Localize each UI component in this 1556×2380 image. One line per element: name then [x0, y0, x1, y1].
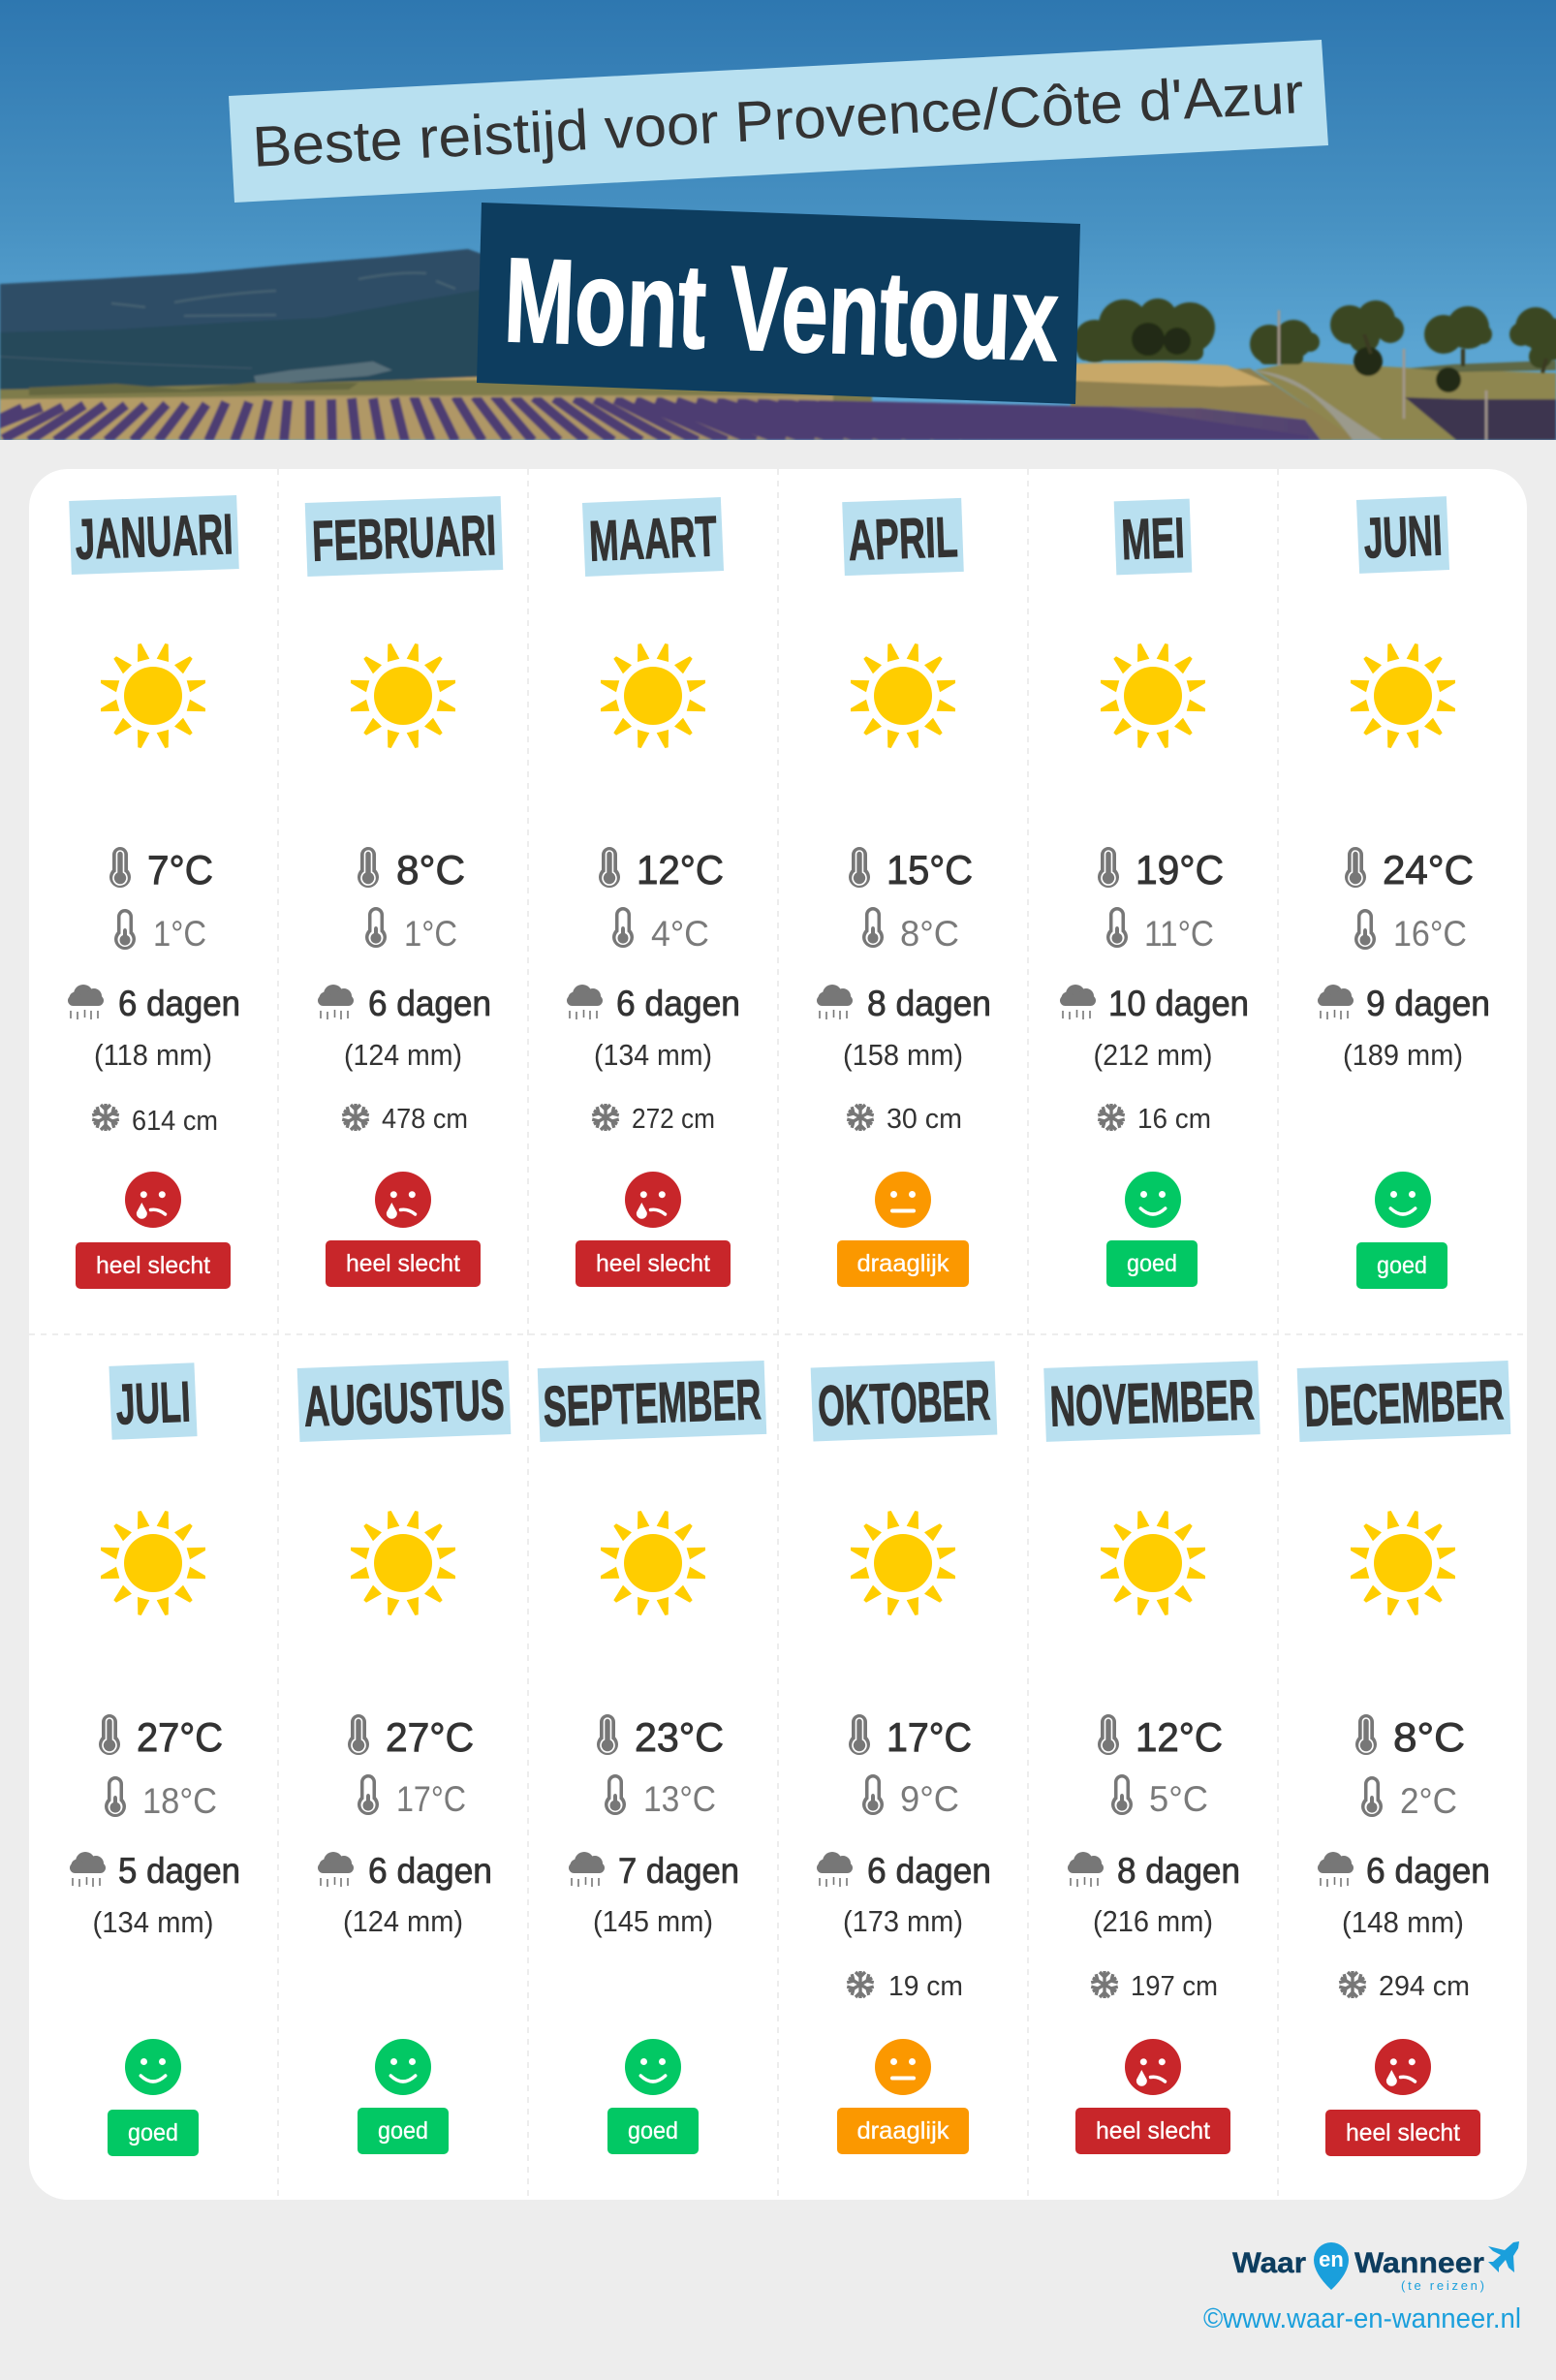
rainfall: (145 mm): [593, 1904, 713, 1938]
rainfall: (134 mm): [93, 1905, 213, 1939]
snowfall: 19 cm: [888, 1971, 963, 2002]
rating badge: [837, 1240, 969, 1287]
month label: SEPTEMBER: [542, 1367, 762, 1439]
max temperature: 12°C: [1136, 1714, 1223, 1760]
snowfall: 16 cm: [1137, 1104, 1211, 1135]
icon: max thermometer: [109, 847, 131, 888]
rating badge: [1356, 1242, 1447, 1289]
rating badge: [607, 2108, 699, 2154]
max temperature: 27°C: [386, 1714, 474, 1760]
icon: rain cloud: [70, 1852, 106, 1887]
max temperature: 27°C: [137, 1714, 223, 1760]
rainfall: (124 mm): [344, 1038, 462, 1072]
rain days: 8 dagen: [1117, 1851, 1240, 1891]
rating badge: draaglijk: [856, 2117, 949, 2145]
icon: rain cloud: [817, 1852, 853, 1887]
rating badge: heel slecht: [346, 1250, 460, 1277]
icon: happy face: [125, 2039, 181, 2095]
icon: max thermometer: [849, 1714, 870, 1755]
icon: sun: [351, 1511, 455, 1615]
panel: mei: [1060, 499, 1249, 1287]
header photo: lavender fields and Mont Ventoux: [0, 0, 1556, 441]
icon: min thermometer: [1361, 1776, 1383, 1817]
month label: JANUARI: [74, 502, 234, 572]
icon: max thermometer: [1098, 1714, 1119, 1755]
panel: augustus: [297, 1361, 511, 2154]
icon: snowflake: [1097, 1104, 1126, 1131]
panel: monthly climate card: [29, 469, 1527, 2200]
min temperature: 17°C: [396, 1779, 466, 1819]
rain days: 6 dagen: [368, 984, 491, 1023]
icon: min thermometer: [1106, 907, 1128, 948]
icon: min thermometer: [612, 907, 634, 948]
max temperature: 8°C: [1393, 1714, 1465, 1760]
max temperature: 12°C: [637, 847, 724, 892]
rating badge: heel slecht: [1346, 2119, 1460, 2146]
icon: max thermometer: [597, 1714, 618, 1755]
panel: juli: [70, 1362, 240, 2156]
icon: happy face: [375, 2039, 431, 2095]
min temperature: 1°C: [153, 914, 206, 954]
min temperature: 5°C: [1149, 1779, 1208, 1819]
icon: airplane: [1488, 2241, 1519, 2272]
icon: neutral face: [875, 2039, 931, 2095]
icon: crying face: [625, 1172, 681, 1228]
min temperature: 13°C: [643, 1779, 716, 1819]
snowfall: 30 cm: [887, 1104, 962, 1135]
min temperature: 8°C: [900, 914, 959, 954]
logo: Waar en Wanneer: (te reizen): [1401, 2278, 1484, 2293]
rating badge: heel slecht: [1096, 2117, 1210, 2145]
month label: JULI: [114, 1369, 192, 1437]
icon: max thermometer: [599, 847, 620, 888]
icon: min thermometer: [1111, 1774, 1133, 1815]
website credit: ©www.waar-en-wanneer.nl: [1203, 2303, 1521, 2334]
rainfall: (189 mm): [1343, 1038, 1463, 1072]
logo: Waar en Wanneer: en: [1319, 2247, 1344, 2271]
icon: happy face: [625, 2039, 681, 2095]
icon: sun: [851, 643, 955, 748]
month label: MEI: [1120, 506, 1186, 572]
rating badge: goed: [378, 2117, 428, 2145]
icon: snowflake: [846, 1971, 875, 1998]
rating badge: draaglijk: [856, 1250, 949, 1277]
icon: max thermometer: [358, 847, 379, 888]
rain days: 5 dagen: [118, 1851, 240, 1891]
panel: september: [538, 1361, 766, 2154]
month label: [109, 1362, 198, 1440]
icon: rain cloud: [567, 985, 603, 1019]
panel: november: [1043, 1361, 1260, 2154]
rain days: 6 dagen: [118, 984, 240, 1023]
rain days: 6 dagen: [867, 1851, 991, 1891]
rain days: 10 dagen: [1108, 984, 1249, 1023]
icon: neutral face: [875, 1172, 931, 1228]
min temperature: 4°C: [651, 914, 709, 954]
icon: max thermometer: [348, 1714, 369, 1755]
icon: rain cloud: [1318, 985, 1354, 1019]
min temperature: 18°C: [142, 1781, 217, 1821]
month label: AUGUSTUS: [302, 1367, 506, 1439]
max temperature: 7°C: [147, 847, 213, 892]
rating badge: [576, 1240, 731, 1287]
month label: [297, 1361, 511, 1442]
icon: rain cloud: [817, 985, 853, 1019]
panel: juni: [1318, 496, 1490, 1289]
panel: april: [817, 498, 991, 1287]
icon: min thermometer: [358, 1774, 379, 1815]
icon: sun: [1101, 1511, 1205, 1615]
rating badge: [1075, 2108, 1230, 2154]
rainfall: (212 mm): [1093, 1038, 1213, 1072]
icon: snowflake: [846, 1104, 875, 1131]
rainfall: (158 mm): [843, 1038, 963, 1072]
icon: snowflake: [91, 1104, 120, 1131]
month label: APRIL: [847, 505, 959, 573]
rating badge: [358, 2108, 449, 2154]
icon: snowflake: [591, 1104, 620, 1131]
icon: rain cloud: [68, 985, 104, 1019]
panel: maart: [567, 497, 740, 1287]
rainfall: (118 mm): [94, 1038, 212, 1072]
max temperature: 8°C: [396, 847, 465, 892]
icon: sun: [1351, 1511, 1455, 1615]
icon: min thermometer: [114, 909, 136, 950]
icon: happy face: [1125, 1172, 1181, 1228]
icon: max thermometer: [1345, 847, 1366, 888]
rating badge: heel slecht: [596, 1250, 710, 1277]
month label: [1356, 496, 1449, 574]
rating badge: [76, 1242, 231, 1289]
month label: [811, 1362, 997, 1441]
logo: Waar en Wanneer: [1232, 2241, 1519, 2293]
icon: max thermometer: [99, 1714, 120, 1755]
icon: rain cloud: [569, 1852, 605, 1887]
icon: sun: [351, 643, 455, 748]
icon: min thermometer: [862, 1774, 884, 1815]
rating badge: [326, 1240, 481, 1287]
icon: sun: [851, 1511, 955, 1615]
icon: sun: [601, 643, 705, 748]
icon: max thermometer: [1098, 847, 1119, 888]
icon: min thermometer: [862, 907, 884, 948]
subtitle banner: [229, 40, 1328, 203]
month label: JUNI: [1362, 503, 1444, 571]
month label: [305, 496, 503, 577]
rain days: 8 dagen: [867, 984, 991, 1023]
icon: min thermometer: [1354, 909, 1376, 950]
title banner: [477, 203, 1080, 404]
min temperature: 9°C: [900, 1779, 959, 1819]
max temperature: 23°C: [635, 1714, 724, 1760]
icon: rain cloud: [1060, 985, 1096, 1019]
icon: max thermometer: [849, 847, 870, 888]
min temperature: 1°C: [404, 914, 457, 954]
snowfall: 197 cm: [1131, 1971, 1218, 2002]
icon: crying face: [1125, 2039, 1181, 2095]
month label: [582, 497, 724, 577]
panel: december: [1297, 1361, 1510, 2156]
max temperature: 19°C: [1136, 847, 1224, 892]
icon: sun: [101, 1511, 205, 1615]
rating badge: [837, 2108, 969, 2154]
panel: oktober: [811, 1362, 997, 2154]
month label: [842, 498, 964, 576]
rating badge: goed: [1377, 1252, 1427, 1279]
icon: sun: [601, 1511, 705, 1615]
subtitle banner: Beste reistijd voor Provence/Côte d'Azur: [251, 61, 1305, 179]
rating badge: goed: [1127, 1250, 1177, 1277]
max temperature: 24°C: [1383, 847, 1474, 892]
icon: crying face: [375, 1172, 431, 1228]
panel: januari: [68, 495, 240, 1289]
rating badge: goed: [628, 2117, 678, 2145]
rating badge: [1106, 1240, 1198, 1287]
snowfall: 272 cm: [632, 1104, 715, 1135]
icon: rain cloud: [318, 985, 354, 1019]
icon: min thermometer: [105, 1776, 126, 1817]
min temperature: 16°C: [1393, 914, 1467, 954]
min temperature: 11°C: [1144, 914, 1214, 954]
icon: sun: [101, 643, 205, 748]
rating badge: [1325, 2110, 1480, 2156]
icon: snowflake: [1338, 1971, 1367, 1998]
icon: happy face: [1375, 1172, 1431, 1228]
icon: sun: [1101, 643, 1205, 748]
month label: MAART: [588, 504, 718, 574]
title banner: Mont Ventoux: [502, 234, 1061, 387]
rating badge: [108, 2110, 199, 2156]
snowfall: 478 cm: [382, 1104, 468, 1135]
rainfall: (134 mm): [594, 1038, 712, 1072]
month label: [538, 1361, 766, 1442]
rainfall: (216 mm): [1093, 1904, 1213, 1938]
rain days: 6 dagen: [616, 984, 740, 1023]
rainfall: (173 mm): [843, 1904, 963, 1938]
icon: snowflake: [341, 1104, 370, 1131]
rainfall: (124 mm): [343, 1904, 463, 1938]
rating badge: goed: [128, 2119, 178, 2146]
month label: OKTOBER: [817, 1368, 991, 1438]
month label: [1114, 499, 1192, 575]
max temperature: 15°C: [887, 847, 973, 892]
icon: crying face: [125, 1172, 181, 1228]
month label: NOVEMBER: [1048, 1367, 1256, 1439]
icon: min thermometer: [605, 1774, 626, 1815]
logo: Waar en Wanneer: Waar: [1232, 2247, 1306, 2279]
icon: snowflake: [1090, 1971, 1119, 1998]
rain days: 9 dagen: [1366, 984, 1490, 1023]
rain days: 6 dagen: [368, 1851, 492, 1891]
snowfall: 614 cm: [132, 1106, 218, 1137]
month label: [1043, 1361, 1260, 1442]
rain days: 6 dagen: [1366, 1851, 1490, 1891]
snowfall: 294 cm: [1379, 1971, 1470, 2002]
max temperature: 17°C: [887, 1714, 972, 1760]
month label: FEBRUARI: [311, 503, 497, 574]
icon: rain cloud: [1318, 1852, 1354, 1887]
month label: [69, 495, 239, 575]
icon: rain cloud: [318, 1852, 354, 1887]
panel: februari: [305, 496, 503, 1287]
rain days: 7 dagen: [618, 1851, 739, 1891]
rating badge: heel slecht: [96, 1252, 210, 1279]
icon: rain cloud: [1068, 1852, 1104, 1887]
icon: min thermometer: [365, 907, 387, 948]
icon: sun: [1351, 643, 1455, 748]
icon: crying face: [1375, 2039, 1431, 2095]
logo: Waar en Wanneer: Wanneer: [1354, 2247, 1484, 2279]
min temperature: 2°C: [1400, 1781, 1457, 1821]
icon: location pin: [1314, 2242, 1349, 2290]
rainfall: (148 mm): [1342, 1905, 1464, 1939]
icon: max thermometer: [1355, 1714, 1377, 1755]
